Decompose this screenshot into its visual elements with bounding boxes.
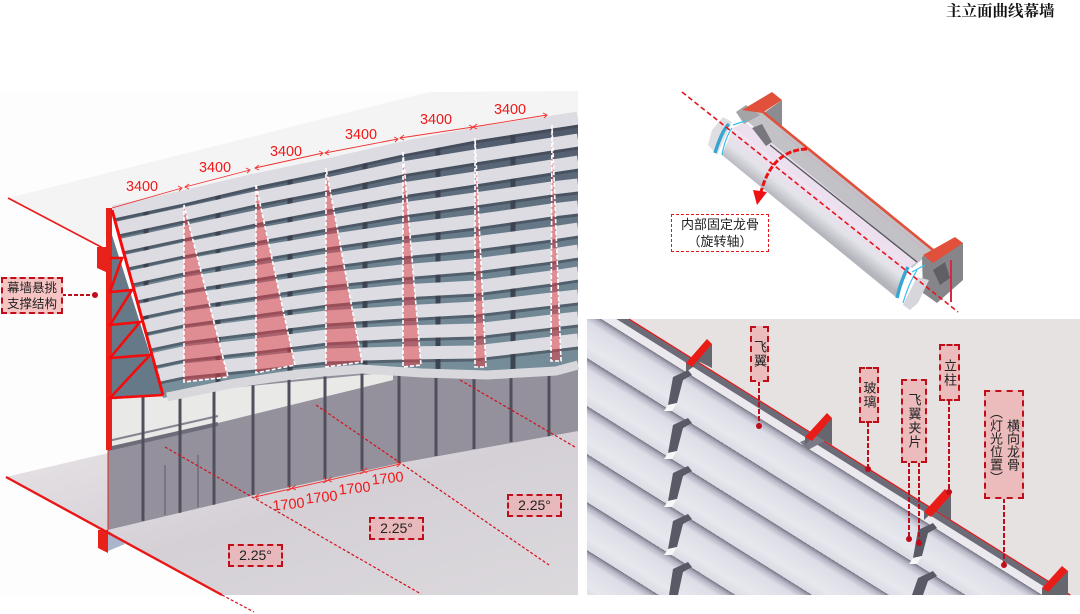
panel: enlarged louvre detail <box>587 319 1080 595</box>
red cantilever support truss <box>8 198 163 553</box>
callout: slope 2: 2.25° <box>380 520 413 536</box>
louvre clips column <box>664 370 937 595</box>
dimension labels: 3400: 3400 <box>199 160 231 176</box>
callout: column: 立柱 <box>942 358 957 386</box>
panel: left perspective view background <box>0 91 578 595</box>
callout: slope 1: 2.25° <box>239 547 272 563</box>
dimension labels: 1700 <box>272 469 404 515</box>
post 4 <box>1042 566 1068 595</box>
callout: column <box>939 344 960 401</box>
dimension labels: 1700: 1700 <box>305 488 338 508</box>
callout: slope 3 <box>507 494 562 517</box>
callout: cantilever support structure: 幕墙悬挑 <box>7 280 57 294</box>
highlighted red triangles <box>184 125 561 382</box>
callout: rotation axis: 内部固定龙骨 <box>681 217 759 232</box>
callout: glass <box>859 367 879 423</box>
callout: rotation axis: （旋转轴） <box>687 234 752 249</box>
callout: slope 2 <box>369 517 424 540</box>
post 2 <box>805 413 832 445</box>
callout: transom <box>984 390 1024 499</box>
curved rotation arrow <box>753 149 807 205</box>
dimension labels: 3400 <box>126 102 526 195</box>
callout: slope 3: 2.25° <box>518 497 551 513</box>
callout: rotation axis <box>671 214 769 252</box>
dimension labels: 1700: 1700 <box>371 469 404 489</box>
callout: wing clip: 飞翼夹片 <box>906 393 922 449</box>
post 1 <box>686 339 712 372</box>
dimension labels: 1700: 1700 <box>272 495 305 515</box>
rotation axis dashed line <box>682 92 958 312</box>
dimension labels: 3400: 3400 <box>494 102 526 118</box>
callout: wing <box>750 326 769 382</box>
floor red edge and slope guide lines <box>6 380 575 612</box>
post 3 <box>924 489 951 520</box>
dimension labels: 1700: 1700 <box>338 479 371 499</box>
callout: glass: 玻璃 <box>862 381 876 409</box>
callout: cantilever support structure <box>1 277 63 314</box>
callout: wing: 飞翼 <box>752 340 767 368</box>
callout: slope 1 <box>228 544 283 567</box>
dimension labels: 3400: 3400 <box>270 144 302 160</box>
dimension labels: 3400: 3400 <box>420 112 452 128</box>
curtain wall louvres <box>113 118 578 398</box>
panel: rotating louvre detail <box>708 92 963 310</box>
dimension labels: 3400: 3400 <box>345 127 377 143</box>
floor plane <box>6 431 578 595</box>
dimension arrows: 3400 <box>112 113 547 208</box>
leader: support structure <box>62 292 98 298</box>
callout: transom: （灯光位置） <box>988 406 1003 484</box>
callout: cantilever support structure: 支撑结构 <box>7 296 57 310</box>
dimension labels: 3400: 3400 <box>126 179 158 195</box>
lower wall with glazing and doors <box>108 355 578 530</box>
callout: transom: 横向龙骨 <box>1005 418 1020 470</box>
dimension arrows: 1700 <box>255 462 400 499</box>
beam and louvre rows <box>587 319 1070 595</box>
sill louvre <box>167 365 578 397</box>
leaders: detail callouts <box>756 381 1007 568</box>
title: 主立面曲线幕墙 <box>946 3 1055 20</box>
callout: wing clip <box>901 379 927 463</box>
